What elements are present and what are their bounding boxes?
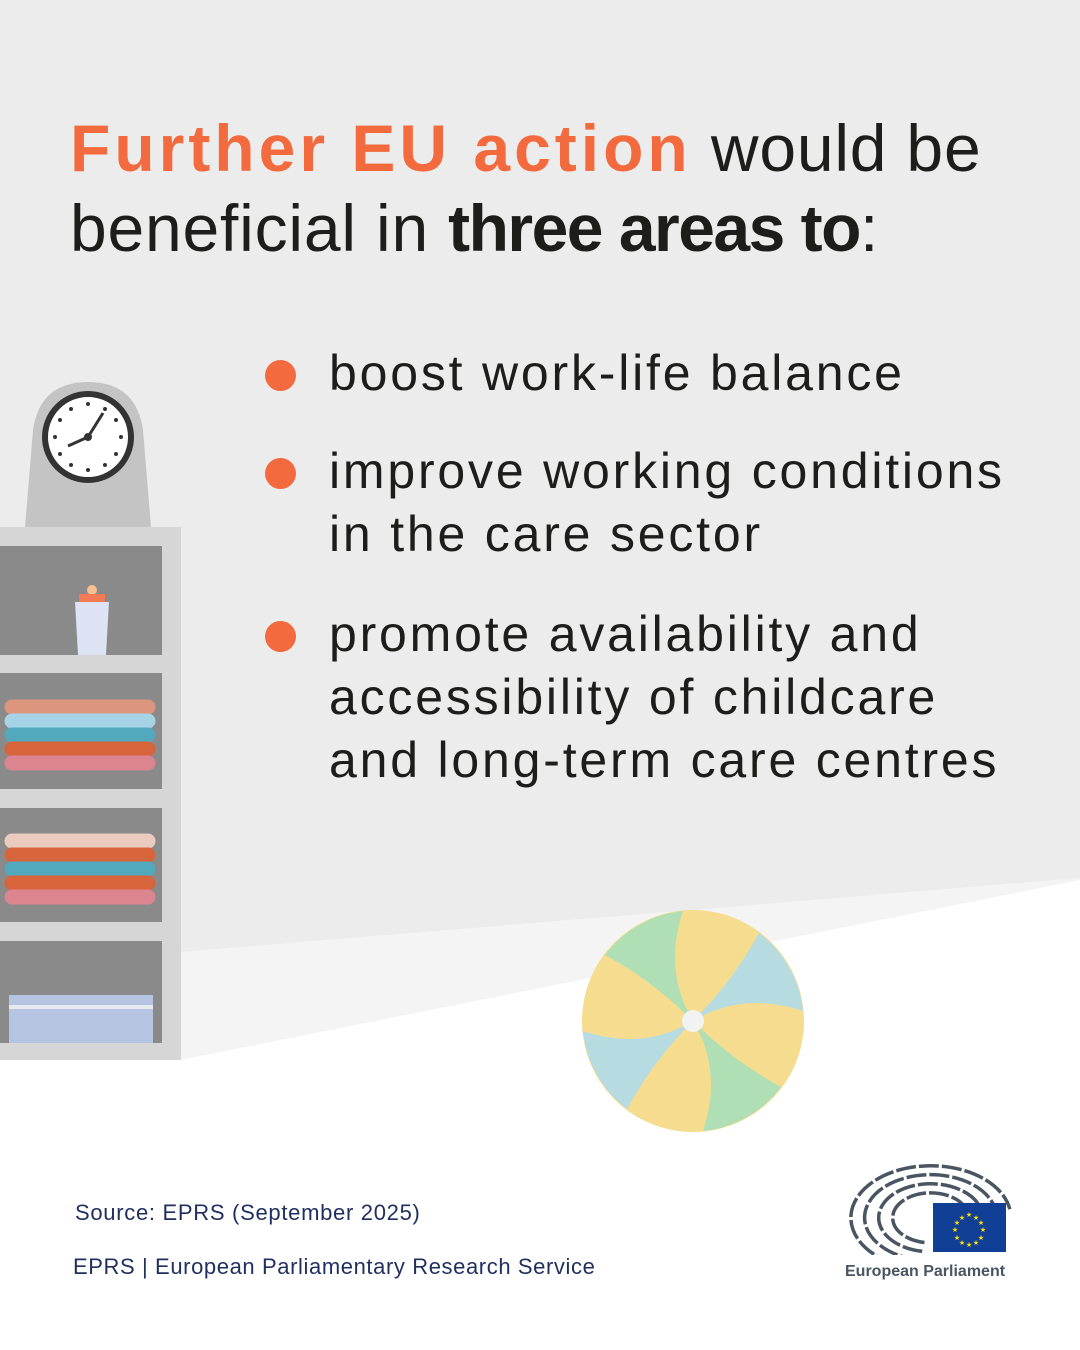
- logo: European Parliament: ★: [978, 1234, 984, 1242]
- illustration: beach ball: [582, 910, 804, 1132]
- bullet: childcare: promote availability and: [329, 606, 922, 662]
- logo: European Parliament: ★: [959, 1214, 965, 1222]
- logo: European Parliament: ★: [954, 1234, 960, 1242]
- bullet: work-life balance: boost work-life balance: [329, 345, 905, 401]
- bullet: childcare: and long-term care centres: [329, 732, 999, 788]
- logo: European Parliament: ★: [973, 1239, 979, 1247]
- title: Further EU action would be: [70, 111, 981, 185]
- logo: European Parliament: ★: [959, 1239, 965, 1247]
- logo: European Parliament: ★: [973, 1214, 979, 1222]
- logo: European Parliament: ★: [952, 1226, 958, 1234]
- logo: European Parliament: ★: [966, 1211, 972, 1219]
- logo: European Parliament: ★: [978, 1219, 984, 1227]
- logo: European Parliament: European Parliament: [845, 1263, 1005, 1280]
- title: beneficial in three areas to:: [70, 191, 879, 265]
- bullet: care sector: [265, 443, 1005, 562]
- logo: European Parliament: [845, 1164, 1012, 1280]
- bullet: care sector: in the care sector: [329, 506, 763, 562]
- bullet: childcare: [265, 606, 999, 788]
- source text: Source: EPRS (September 2025): [75, 1200, 421, 1225]
- footer credit: EPRS | European Parliamentary Research Service: [73, 1254, 595, 1279]
- illustration: shelf with clock: [0, 382, 181, 1060]
- bullet: childcare: accessibility of childcare: [329, 669, 938, 725]
- logo: European Parliament: ★: [980, 1226, 986, 1234]
- logo: European Parliament: ★: [966, 1241, 972, 1249]
- title: [70, 111, 981, 265]
- logo: European Parliament: ★: [954, 1219, 960, 1227]
- bullet: care sector: improve working conditions: [329, 443, 1005, 499]
